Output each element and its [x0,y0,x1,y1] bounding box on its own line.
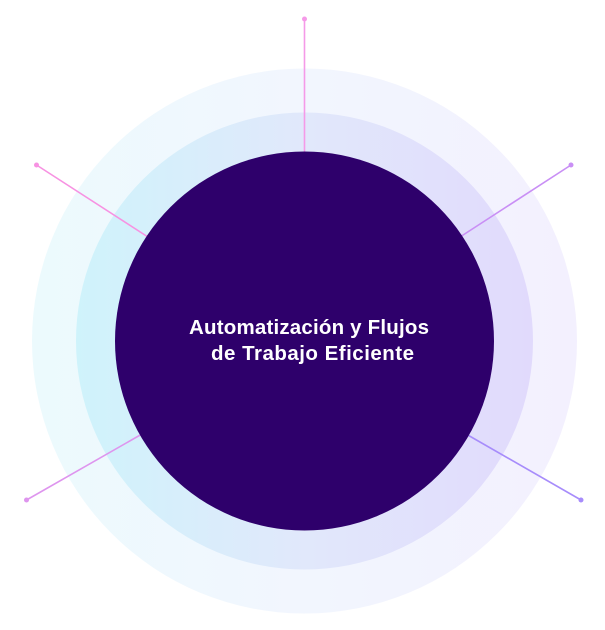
central title [189,316,429,365]
connector: lower right [466,434,584,502]
central circle [115,152,494,530]
outer ring [32,68,577,614]
middle ring [76,112,533,570]
central title: de Trabajo Eficiente [211,342,414,365]
connector: upper right [460,162,574,237]
connector: lower left [24,434,142,502]
connector: upper left [34,162,148,237]
central title: Automatización y Flujos [189,316,429,339]
connector: top [302,16,307,153]
